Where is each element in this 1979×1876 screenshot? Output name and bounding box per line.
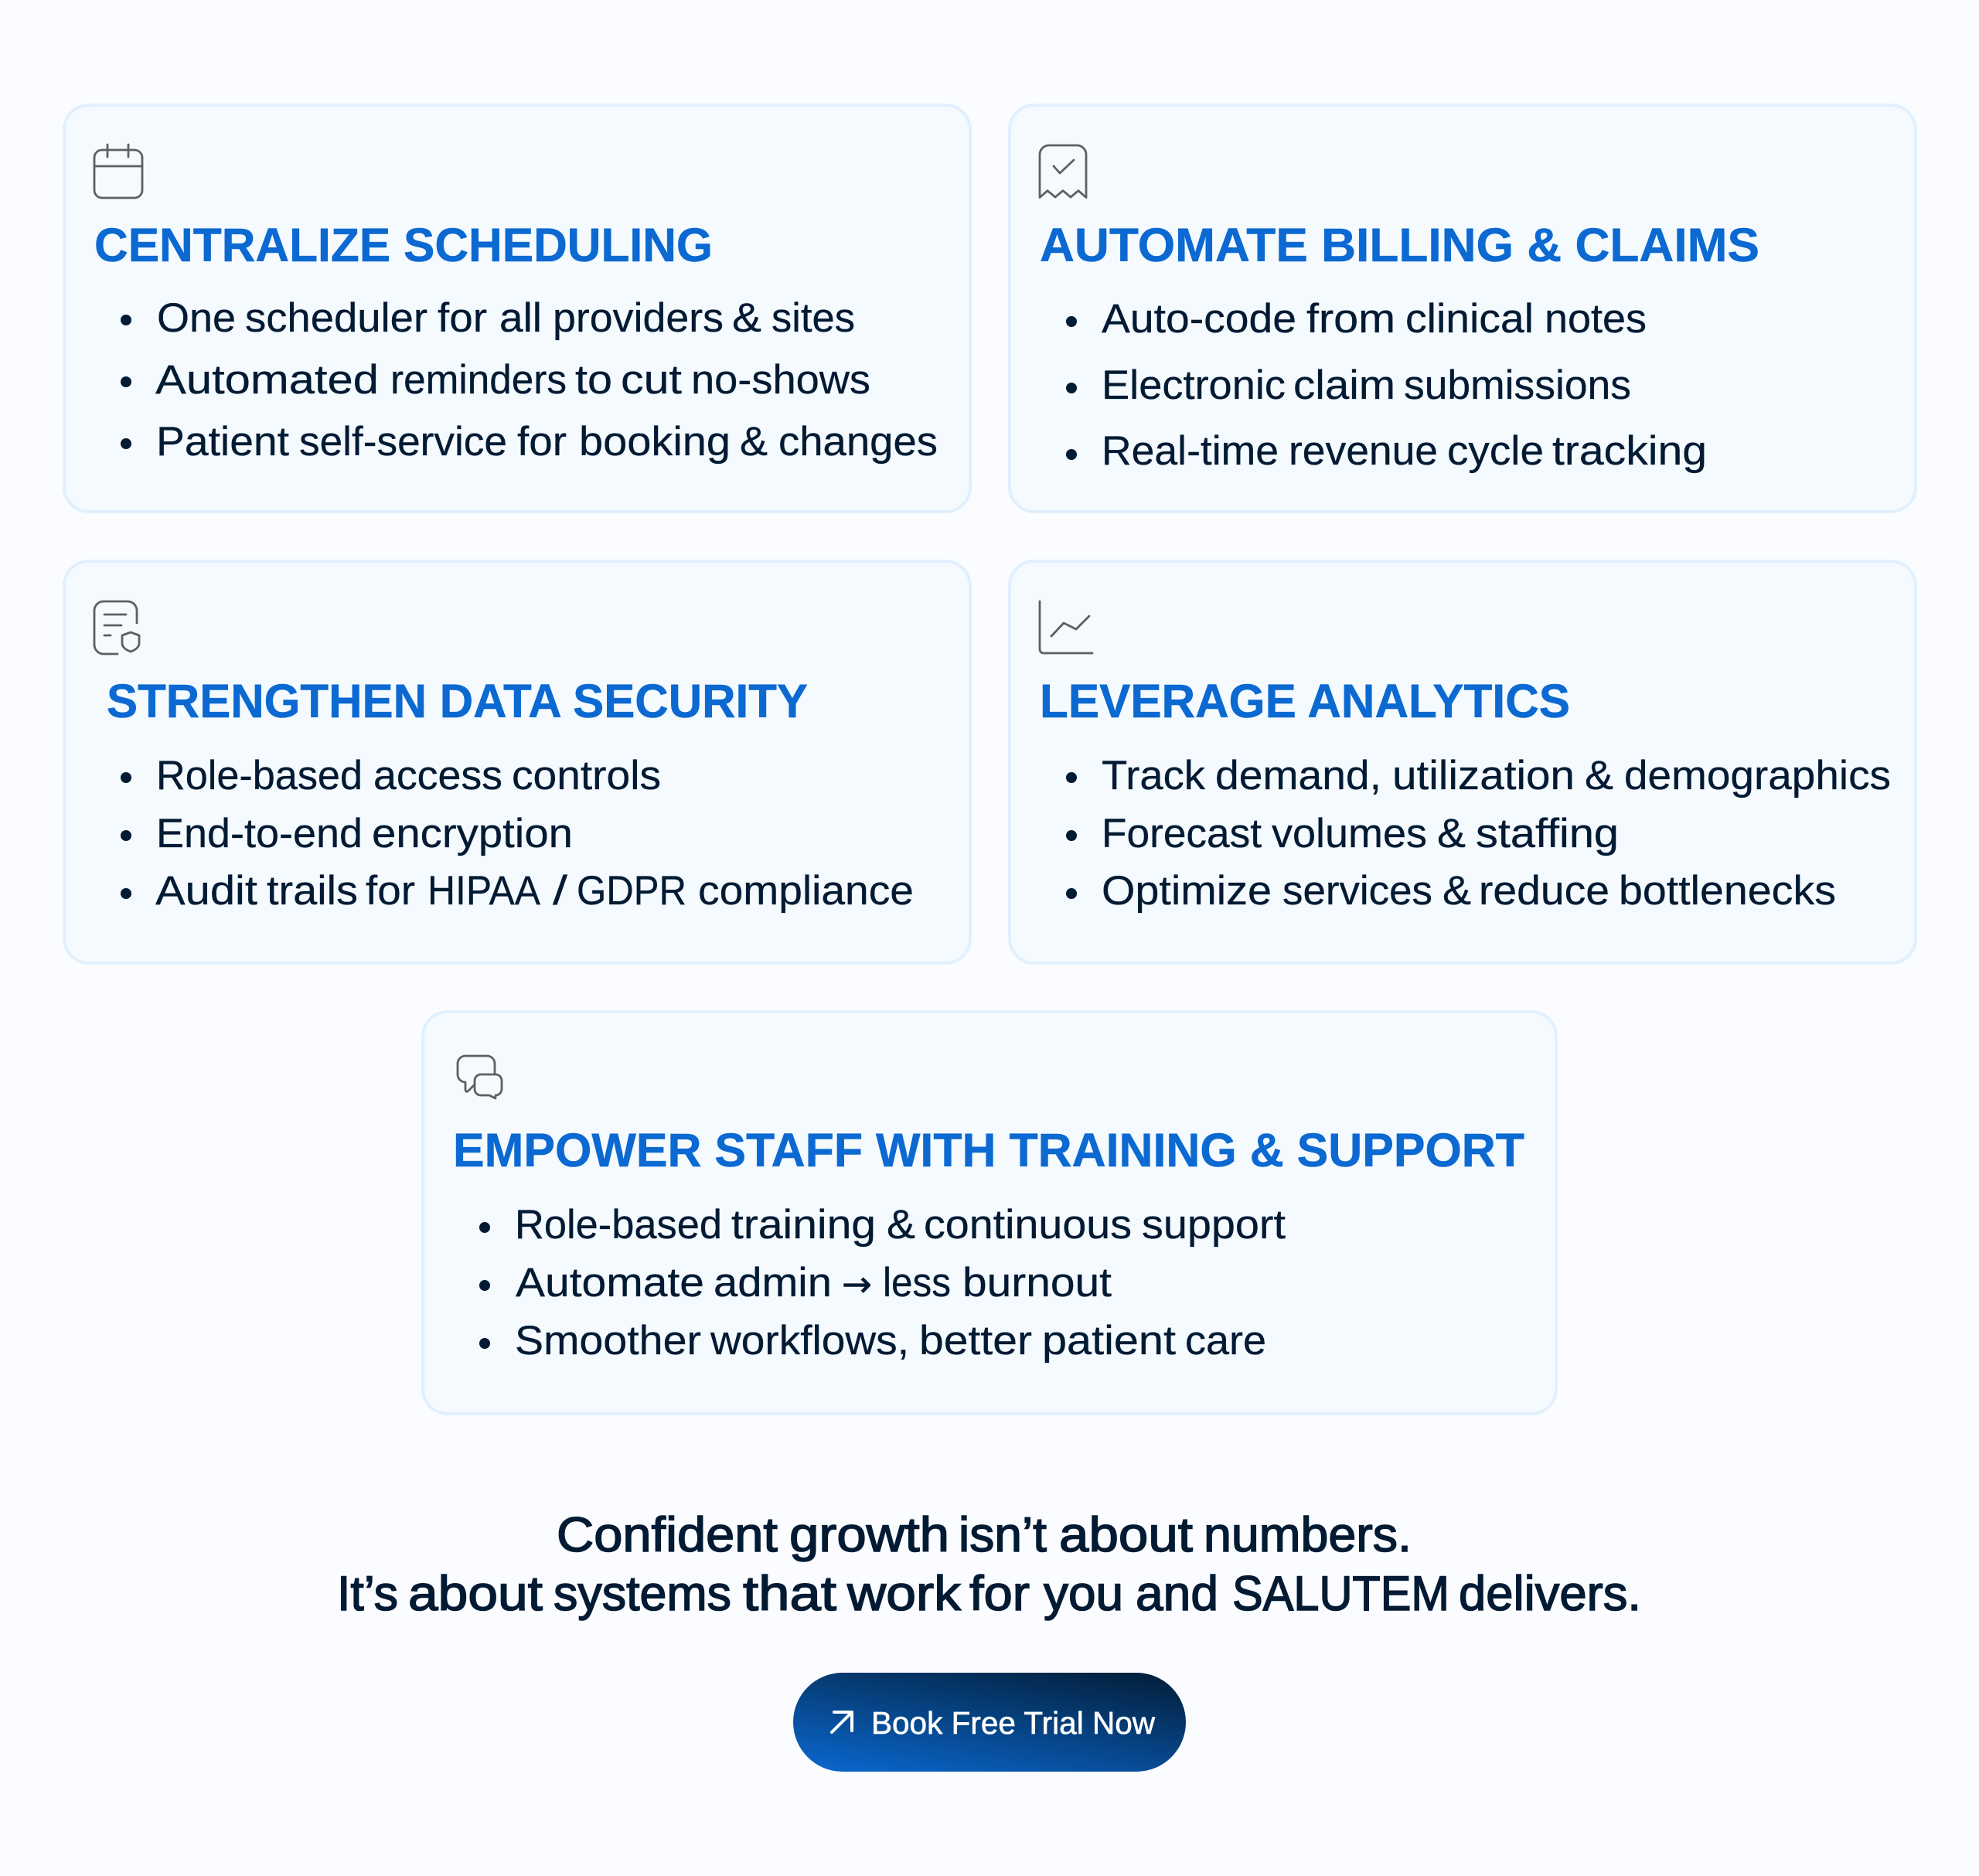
heading: automate billing and claims: AUTOMATE BILLING & CLAIMS <box>1040 219 1759 271</box>
bullet list: & <box>1443 868 1471 914</box>
bullet list: demographics <box>1624 753 1891 798</box>
bullet list: to <box>575 357 612 403</box>
bullet list: demand, <box>1215 753 1381 798</box>
bullet list: all <box>499 295 542 341</box>
bullet list: Real-time <box>1102 428 1279 474</box>
bullet list: bottlenecks <box>1619 868 1836 914</box>
bullet list: End-to-end <box>156 811 363 856</box>
closing statement <box>337 1508 1641 1621</box>
panel: strengthen data security <box>64 561 970 963</box>
bullet list: Role-based <box>515 1202 722 1248</box>
closing statement: isn’t <box>959 1508 1047 1562</box>
bullet list: support <box>1142 1202 1286 1248</box>
bullet list: booking <box>579 419 731 465</box>
closing statement: systems <box>554 1567 731 1621</box>
bullet list: burnout <box>962 1260 1112 1306</box>
panel: automate billing and claims <box>1010 105 1916 512</box>
bullet list: reduce <box>1479 868 1609 914</box>
bullet list: trails <box>267 868 358 914</box>
bullet list: no-shows <box>691 357 870 403</box>
bullet list: & <box>732 295 761 341</box>
bullet list: scheduler <box>245 295 427 341</box>
bullet list: & <box>1585 753 1613 798</box>
bullet list: access <box>373 753 502 798</box>
bullet list: Role-based <box>156 753 363 798</box>
bullet list: submissions <box>1404 363 1631 408</box>
bullet list: controls <box>512 753 661 798</box>
panel: empower staff with training and support <box>423 1012 1556 1414</box>
closing statement: for <box>969 1567 1030 1621</box>
closing statement: SALUTEM <box>1232 1567 1449 1621</box>
bullet list: care <box>1185 1318 1266 1364</box>
button label: Book Free Trial Now <box>871 1705 1155 1741</box>
bullet list <box>121 753 914 914</box>
bullet list: admin <box>714 1260 832 1306</box>
bullet list: Track <box>1102 753 1205 798</box>
bullet list: → <box>842 1263 872 1305</box>
bullet list: for <box>517 419 567 465</box>
bullet list: patient <box>1042 1318 1176 1364</box>
closing statement: that <box>743 1567 837 1621</box>
bullet list: for <box>438 295 487 341</box>
bullet list: Audit <box>155 868 257 914</box>
closing statement: numbers. <box>1204 1508 1412 1562</box>
bullet list: Smoother <box>515 1318 701 1364</box>
bullet list: from <box>1306 296 1395 342</box>
closing statement: It’s <box>337 1567 398 1621</box>
panel: centralize scheduling <box>64 105 970 512</box>
bullet list: services <box>1282 868 1432 914</box>
bullet list: Electronic <box>1102 363 1286 408</box>
heading: leverage analytics: LEVERAGE ANALYTICS <box>1040 675 1570 727</box>
icon: arrow up right <box>832 1712 852 1732</box>
bullet list: HIPAA <box>427 868 541 914</box>
bullet list: reminders <box>390 357 567 403</box>
bullet list: compliance <box>698 868 914 914</box>
bullet list: encryption <box>372 811 573 856</box>
icon: chat bubbles <box>458 1056 502 1098</box>
bullet list <box>121 295 938 465</box>
bullet list: providers <box>553 295 724 341</box>
closing statement: you <box>1044 1567 1123 1621</box>
bullet list: self-service <box>299 419 507 465</box>
bullet list: workflows, <box>710 1318 909 1364</box>
bullet list: GDPR <box>577 868 686 914</box>
bullet list: & <box>1437 811 1466 856</box>
bullet list: changes <box>778 419 938 465</box>
closing statement: and <box>1136 1567 1218 1621</box>
icon: calendar <box>94 145 142 198</box>
closing statement: about <box>408 1567 543 1621</box>
bullet list: Automate <box>516 1260 704 1306</box>
heading: strengthen data security: STRENGTHEN DATA SECURITY <box>107 675 808 727</box>
bullet list: for <box>366 868 415 914</box>
closing statement: about <box>1059 1508 1194 1562</box>
heading: centralize scheduling: CENTRALIZE SCHEDULING <box>94 219 713 271</box>
bullet list <box>479 1202 1286 1364</box>
closing statement: work <box>846 1567 962 1621</box>
icon: receipt with check <box>1040 145 1086 198</box>
bullet list: cycle <box>1447 428 1544 474</box>
closing statement: Confident <box>557 1508 778 1562</box>
bullet list: training <box>731 1202 876 1248</box>
closing statement: growth <box>789 1508 949 1562</box>
bullet list: less <box>883 1260 951 1306</box>
bullet list: & <box>740 419 768 465</box>
bullet list: volumes <box>1272 811 1427 856</box>
bullet list: utilization <box>1392 753 1575 798</box>
bullet list: Forecast <box>1102 811 1262 856</box>
bullet list: cut <box>621 357 682 403</box>
bullet list: Optimize <box>1102 868 1272 914</box>
icon: line chart <box>1040 601 1092 653</box>
bullet list: / <box>553 868 567 914</box>
bullet list <box>1066 296 1707 474</box>
bullet list: One <box>157 295 236 341</box>
bullet list: tracking <box>1552 428 1707 474</box>
bullet list: staffing <box>1476 811 1619 856</box>
bullet list: & <box>887 1202 915 1248</box>
bullet list: notes <box>1545 296 1647 342</box>
bullet list: Automated <box>155 357 379 403</box>
bullet list: revenue <box>1289 428 1438 474</box>
bullet list: Auto-code <box>1102 296 1296 342</box>
icon: document with shield <box>94 601 139 654</box>
bullet list: continuous <box>924 1202 1132 1248</box>
bullet list <box>1066 753 1891 914</box>
panel: leverage analytics <box>1010 561 1916 963</box>
bullet list: sites <box>772 295 855 341</box>
bullet list: better <box>919 1318 1032 1364</box>
heading: empower staff with training and support: EMPOWER STAFF WITH TRAINING & SUPPORT <box>453 1124 1524 1176</box>
button: book free trial now <box>793 1673 1186 1772</box>
bullet list: Patient <box>156 419 289 465</box>
closing statement: delivers. <box>1459 1567 1641 1621</box>
bullet list: claim <box>1293 363 1395 408</box>
bullet list: clinical <box>1405 296 1534 342</box>
